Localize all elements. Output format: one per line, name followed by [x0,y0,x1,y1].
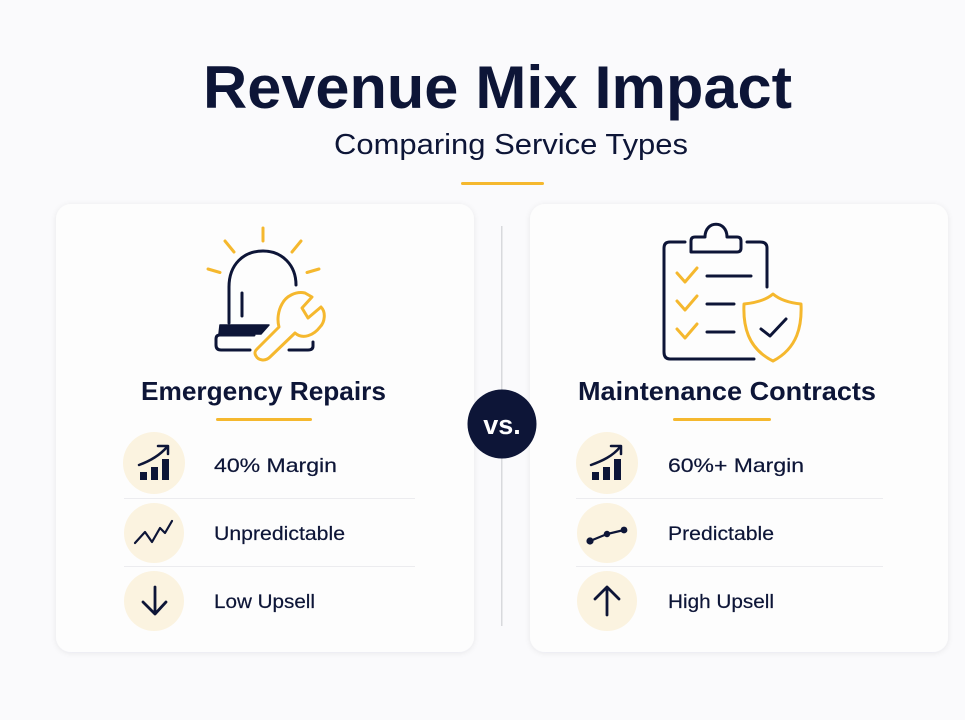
heading underline [216,418,312,421]
row: 60%+ margin: 60%+ Margin [668,455,804,477]
row: unpredictable [124,503,345,563]
row: predictable [577,503,774,563]
vs badge [468,390,536,458]
heading underline [673,418,771,421]
heading: emergency repairs: Emergency Repairs [141,376,386,406]
icon: clipboard with shield [664,224,801,361]
row: 60%+ margin [576,432,804,494]
row: predictable: Predictable [668,523,774,545]
vs badge: vs. [483,410,521,440]
row: 40% margin [123,432,337,494]
panel: emergency repairs [56,204,474,652]
heading: maintenance contracts: Maintenance Contracts [578,376,876,406]
title underline [461,182,544,185]
panel: maintenance contracts [530,204,948,652]
row: unpredictable: Unpredictable [214,523,345,545]
row: high upsell [577,571,774,631]
row: 40% margin: 40% Margin [214,455,337,477]
row: high upsell: High Upsell [668,591,774,613]
row: low upsell: Low Upsell [214,591,315,613]
icon: alarm light with wrench [208,228,324,360]
title: Revenue Mix Impact [203,54,792,121]
row: low upsell [124,571,315,631]
center divider [501,226,502,626]
subtitle: Comparing Service Types [334,129,688,161]
